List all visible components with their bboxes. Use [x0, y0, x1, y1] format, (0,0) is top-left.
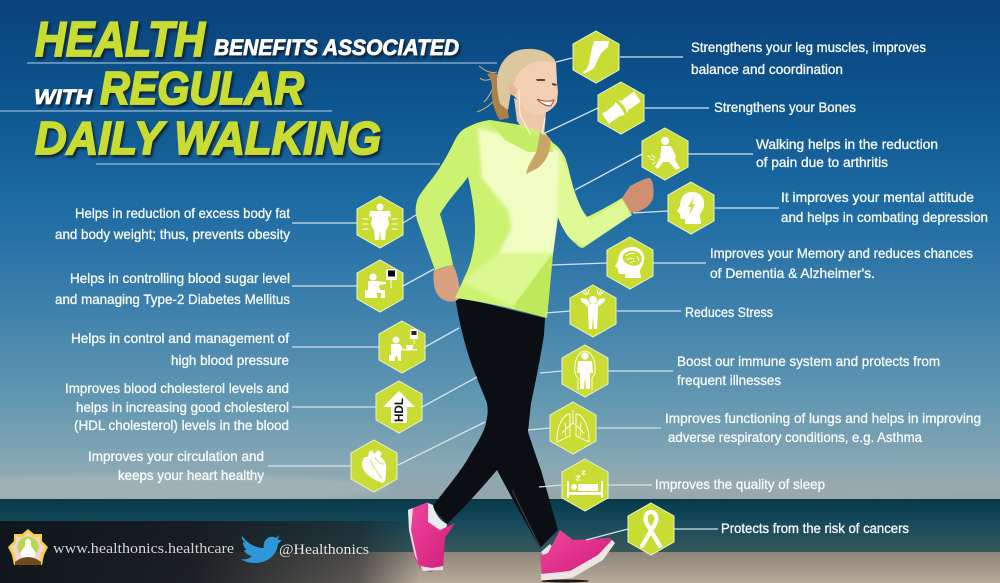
- text: lungs: adverse respiratory conditions, e.g. Asthma: [668, 430, 922, 445]
- text: mental attitude: It improves your mental attitude: [781, 190, 974, 205]
- title: HEALTH: [35, 13, 206, 67]
- benefit: memory: [552, 237, 973, 289]
- text: heart: Improves your circulation and: [88, 449, 264, 464]
- benefit: heart: [88, 422, 485, 492]
- text: memory: Improves your Memory and reduces chances: [710, 246, 973, 261]
- hexagon icon: bone joint: [598, 82, 644, 134]
- benefit: arthritis: [575, 128, 938, 190]
- left sock: [428, 503, 447, 530]
- walking woman: [408, 49, 654, 582]
- smile: [537, 99, 554, 106]
- text: cholesterol: (HDL cholesterol) levels in the blood: [74, 418, 289, 433]
- benefit: immune system: [540, 345, 940, 397]
- benefit: stress: [545, 285, 773, 337]
- text: obesity: and body weight; thus, prevents obesity: [55, 227, 290, 242]
- hexagon icon: anatomical heart: [351, 440, 397, 492]
- hair top: [497, 49, 556, 110]
- text: blood sugar: and managing Type-2 Diabetes Mellitus: [55, 292, 290, 307]
- benefit: obesity: [55, 196, 416, 248]
- benefit: leg muscles: [556, 31, 926, 83]
- benefit: bones: [543, 82, 856, 134]
- hoodie: [416, 120, 632, 318]
- text: immune system: Boost our immune system and protects from: [677, 354, 940, 369]
- benefit: mental attitude: [633, 182, 988, 234]
- text: lungs: Improves functioning of lungs and helps in improving: [665, 411, 981, 426]
- logo: Healthonics emblem: [8, 529, 48, 565]
- hexagon icon: HDL up arrow: [376, 381, 422, 433]
- braid on chest: [526, 132, 550, 174]
- text: blood pressure: high blood pressure: [171, 353, 289, 368]
- text: cholesterol: Improves blood cholesterol levels and: [65, 381, 289, 396]
- icon: twitter bird: [241, 535, 282, 563]
- benefit: cancers: [586, 503, 909, 555]
- hexagon icon: protected person: [562, 345, 608, 397]
- title: DAILY WALKING: [35, 112, 381, 164]
- text: cholesterol: helps in increasing good cholesterol: [76, 400, 289, 415]
- hexagon icon: person with glucose monitor: [357, 260, 403, 312]
- benefit: lungs: [528, 402, 981, 454]
- footer twitter handle: @Healthonics: [279, 542, 369, 558]
- hexagon icon: overweight body: [357, 196, 403, 248]
- right pink shoe: [540, 530, 615, 582]
- face: [510, 59, 558, 115]
- left hand: [433, 265, 461, 302]
- text: leg muscles: Strengthens your leg muscles, improves: [691, 40, 926, 55]
- hexagon icon: knee pain: [642, 128, 688, 180]
- text: mental attitude: and helps in combating depression: [781, 210, 988, 225]
- footer website address: www.healthonics.healthcare: [53, 541, 234, 557]
- neck: [514, 98, 546, 144]
- text: immune system: frequent illnesses: [677, 373, 781, 388]
- footer dark band: [0, 521, 420, 583]
- title: WITH: [34, 86, 93, 109]
- hexagon icon: stressed person: [570, 285, 616, 337]
- hexagon icon: ribbon: [628, 503, 674, 555]
- left pink shoe: [408, 502, 455, 572]
- text: blood pressure: Helps in control and management of: [71, 331, 289, 346]
- text: blood sugar: Helps in controlling blood sugar level: [70, 271, 290, 286]
- text: sleep: Improves the quality of sleep: [655, 477, 825, 492]
- text: obesity: Helps in reduction of excess body fat: [75, 206, 290, 221]
- earphone cords: [519, 90, 545, 134]
- text: bones: Strengthens your Bones: [714, 100, 856, 115]
- hexagon icon: leg: [573, 31, 619, 83]
- text: cancers: Protects from the risk of cancers: [721, 521, 909, 536]
- legging seam stripe: [512, 490, 540, 547]
- hexagon icon: head with brain: [607, 237, 653, 289]
- benefit: sleep: [539, 459, 825, 511]
- ear and earphone: [508, 83, 517, 96]
- hair wisps and ponytail: [477, 66, 509, 120]
- text: leg muscles: balance and coordination: [691, 62, 843, 77]
- right hand: [622, 178, 654, 213]
- leggings: [432, 296, 558, 548]
- right sock: [541, 544, 553, 557]
- title: REGULAR: [100, 62, 304, 114]
- title: [0, 13, 497, 164]
- hexagon icon: HDL up arrow: HDL: [394, 398, 406, 422]
- eyes: [536, 79, 557, 86]
- text: heart: keeps your heart healthy: [118, 468, 264, 483]
- benefit: blood sugar: [55, 260, 434, 312]
- text: arthritis: of pain due to arthritis: [756, 155, 888, 170]
- hexagon icon: head with lightning bolt: [668, 182, 714, 234]
- text: memory: of Dementia & Alzheimer's.: [710, 266, 875, 281]
- hexagon icon: bed: [562, 459, 608, 511]
- benefit: cholesterol: [65, 377, 477, 433]
- text: arthritis: Walking helps in the reduction: [756, 137, 938, 152]
- title: BENEFITS ASSOCIATED: [214, 35, 459, 60]
- hexagon icon: lungs: [550, 402, 596, 454]
- benefit: blood pressure: [71, 321, 459, 373]
- text: stress: Reduces Stress: [685, 305, 773, 320]
- hexagon icon: person with blood pressure monitor: [379, 321, 425, 373]
